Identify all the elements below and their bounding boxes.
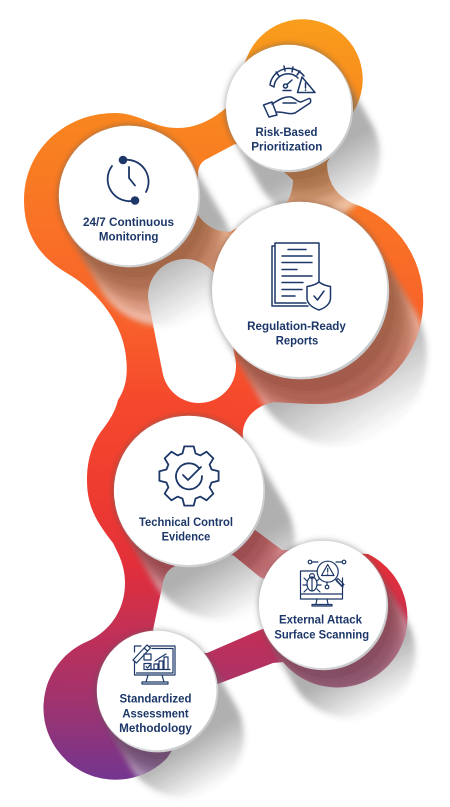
panel: Regulation-Ready Reports	[212, 202, 389, 379]
label: Methodology	[119, 723, 192, 735]
label: Standardized	[120, 693, 192, 705]
label: Surface Scanning	[274, 630, 369, 642]
label: Reports	[276, 336, 318, 348]
panel: Standardized Assessment Methodology	[97, 631, 218, 752]
label: Evidence	[162, 532, 210, 544]
icon: monitor with checklist and chart	[133, 645, 175, 684]
icon: monitor, bug and magnifier	[300, 560, 346, 606]
panel: External Attack Surface Scanning	[259, 541, 388, 670]
icon: gear with check	[159, 446, 219, 506]
panel: 24/7 Continuous Monitoring	[59, 126, 200, 267]
shadow tint on blob	[54, 40, 422, 778]
label: Prioritization	[251, 142, 322, 154]
label: Technical Control	[139, 517, 233, 529]
label: Assessment	[122, 708, 189, 720]
soft grey shadows on white	[129, 108, 350, 736]
label	[139, 517, 233, 544]
label: Monitoring	[99, 232, 158, 244]
label	[274, 615, 369, 642]
icon: document with shield	[272, 243, 330, 310]
panel: Technical Control Evidence	[114, 416, 265, 567]
label: External Attack	[279, 615, 363, 627]
label	[119, 693, 192, 735]
icon: gauge with warning and hand	[264, 66, 315, 117]
label: 24/7 Continuous	[83, 217, 174, 229]
label	[251, 127, 322, 154]
label: Regulation-Ready	[247, 321, 346, 333]
panel: Risk-Based Prioritization	[226, 45, 353, 172]
label: Risk-Based	[256, 127, 318, 139]
label	[247, 321, 346, 348]
icon: clock	[108, 156, 149, 205]
label	[83, 217, 174, 244]
